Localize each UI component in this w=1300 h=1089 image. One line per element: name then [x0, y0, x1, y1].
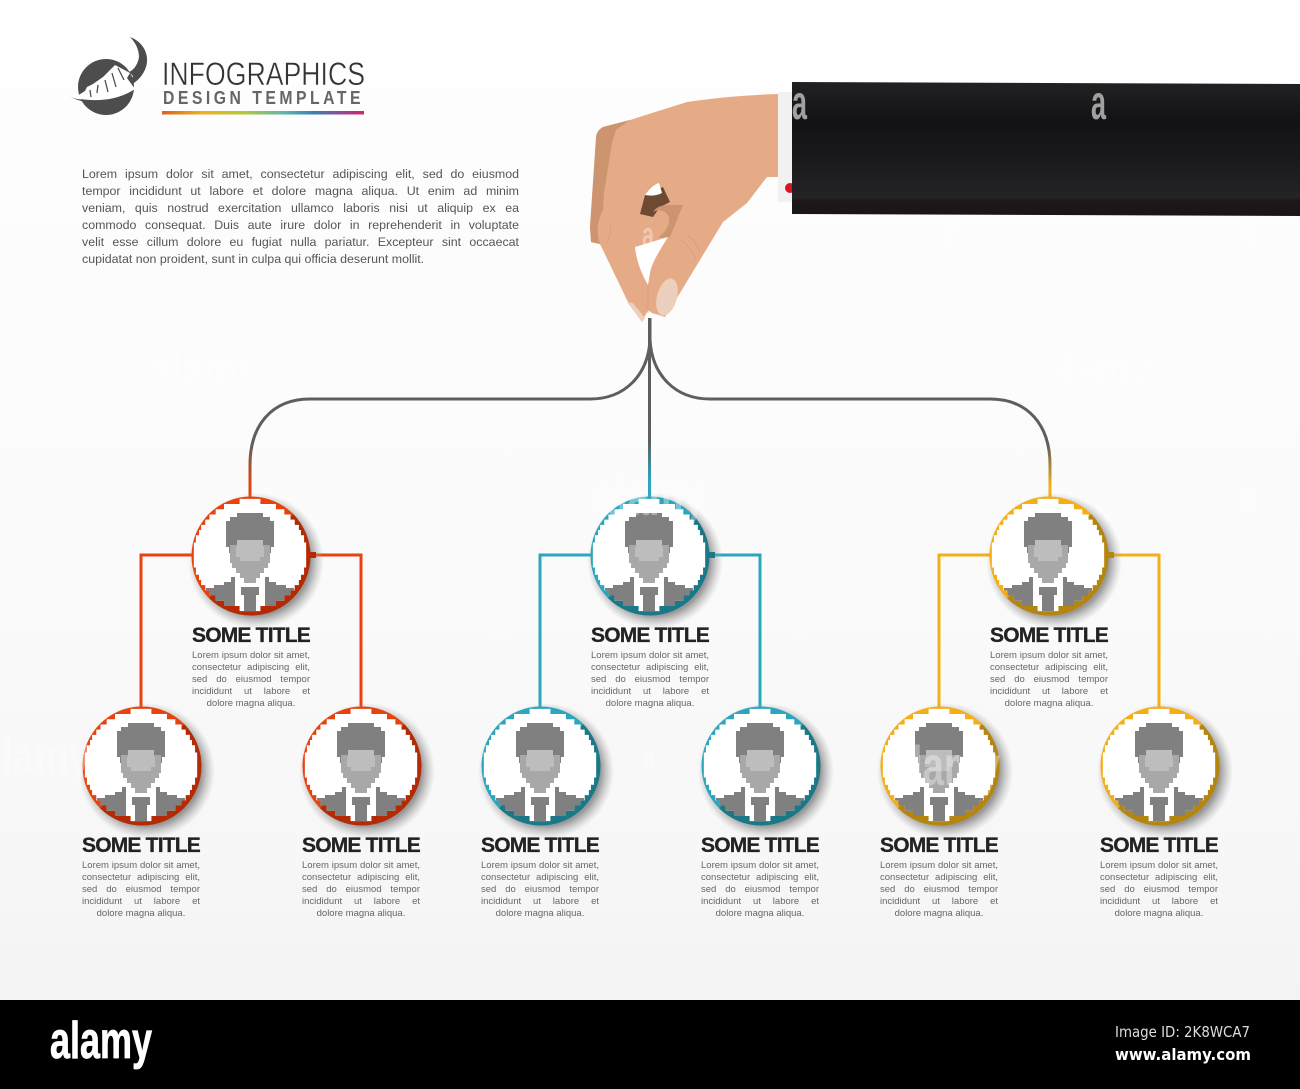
text: yellow manager: Lorem ipsum dolor sit amet, — [990, 650, 1108, 661]
node: red manager portrait — [188, 493, 324, 629]
blue branch connectors — [540, 555, 760, 708]
text: red report 2: sed do eiusmod tempor — [302, 884, 420, 895]
text: blue manager: SOME TITLE — [591, 624, 709, 647]
intro paragraph: tempor incididunt ut labore et dolore magna aliqua. Ut enim ad minim — [82, 184, 519, 198]
hand pinching the connectors — [590, 94, 778, 322]
watermarks: a — [643, 737, 656, 778]
node: yellow manager portrait — [986, 493, 1122, 629]
red branch connectors — [141, 555, 361, 708]
text: yellow report 1 — [880, 834, 998, 919]
text: red report 2: consectetur adipiscing elit, — [302, 872, 420, 883]
node: red report 2 portrait — [299, 703, 435, 839]
text: blue report 1: sed do eiusmod tempor — [481, 884, 599, 895]
text: blue manager: sed do eiusmod tempor — [591, 674, 709, 685]
intro paragraph — [82, 167, 519, 266]
watermarks: a — [943, 212, 956, 253]
text: red report 1: consectetur adipiscing elit, — [82, 872, 200, 883]
watermarks: a — [642, 214, 655, 255]
text: red report 2: Lorem ipsum dolor sit amet, — [302, 860, 420, 871]
intro paragraph: cupidatat non proident, sunt in culpa qui officia deserunt mollit. — [82, 252, 424, 266]
text: yellow manager: incididunt ut labore et — [990, 686, 1108, 697]
watermarks: a — [1243, 212, 1256, 253]
footer bar — [0, 1000, 1300, 1089]
text: yellow report 2: dolore magna aliqua. — [1115, 908, 1203, 919]
logo rainbow bar — [162, 111, 364, 114]
text: yellow manager: SOME TITLE — [990, 624, 1108, 647]
text: blue manager: Lorem ipsum dolor sit amet, — [591, 650, 709, 661]
text: blue report 2: sed do eiusmod tempor — [701, 884, 819, 895]
text: blue report 1: SOME TITLE — [481, 834, 599, 857]
text: blue manager: dolore magna aliqua. — [606, 698, 694, 709]
text: blue report 2: SOME TITLE — [701, 834, 819, 857]
text: yellow report 1: Lorem ipsum dolor sit amet, — [880, 860, 998, 871]
watermarks: alamy — [595, 464, 705, 527]
text: red manager: dolore magna aliqua. — [207, 698, 295, 709]
intro paragraph: velit esse cillum dolore eu fugiat nulla pariatur. Excepteur sint occaecat — [82, 235, 519, 249]
main connector: to left branch — [250, 318, 650, 498]
text: blue manager — [591, 624, 710, 709]
text: red report 2: incididunt ut labore et — [302, 896, 420, 907]
main connector: to right branch — [650, 318, 1050, 498]
text: yellow manager: sed do eiusmod tempor — [990, 674, 1108, 685]
text: yellow manager: dolore magna aliqua. — [1005, 698, 1093, 709]
text: blue report 1: Lorem ipsum dolor sit amet, — [481, 860, 599, 871]
text: yellow report 1: dolore magna aliqua. — [895, 908, 983, 919]
arm: suit sleeve and cuff: a — [792, 77, 807, 130]
watermarks: alamy — [1042, 337, 1152, 400]
text: blue report 1: dolore magna aliqua. — [496, 908, 584, 919]
text: red report 1: dolore magna aliqua. — [97, 908, 185, 919]
text: yellow manager: consectetur adipiscing elit, — [990, 662, 1108, 673]
text: blue manager: incididunt ut labore et — [591, 686, 709, 697]
logo icon — [70, 37, 147, 115]
text: yellow report 2: incididunt ut labore et — [1100, 896, 1218, 907]
arm: suit sleeve and cuff: a — [1091, 77, 1106, 130]
watermarks: a — [493, 605, 506, 646]
footer image id: Image ID: 2K8WCA7 — [1115, 1023, 1250, 1041]
node: blue report 1 portrait — [478, 703, 614, 839]
text: yellow report 1: sed do eiusmod tempor — [880, 884, 998, 895]
text: red report 2: dolore magna aliqua. — [317, 908, 405, 919]
text: blue manager: consectetur adipiscing elit, — [591, 662, 709, 673]
text: red manager — [192, 624, 310, 709]
text: blue report 1: consectetur adipiscing elit, — [481, 872, 599, 883]
text: yellow manager — [990, 624, 1108, 709]
text: blue report 2 — [701, 834, 820, 919]
text: yellow report 1: incididunt ut labore et — [880, 896, 998, 907]
text: red report 2: SOME TITLE — [302, 834, 420, 857]
watermarks: alamy — [890, 734, 1000, 797]
intro paragraph: commodo consequat. Duis aute irure dolor in reprehenderit in voluptate — [82, 218, 519, 232]
watermarks: alamy — [150, 337, 260, 400]
node: yellow report 1 portrait — [877, 703, 1013, 839]
watermarks: a — [1243, 475, 1256, 516]
text: red manager: incididunt ut labore et — [192, 686, 310, 697]
logo wordmark — [162, 56, 365, 108]
text: yellow report 1: SOME TITLE — [880, 834, 998, 857]
node: blue report 2 portrait — [698, 703, 834, 839]
text: yellow report 2: sed do eiusmod tempor — [1100, 884, 1218, 895]
text: yellow report 2 — [1100, 834, 1218, 919]
node: blue manager portrait — [587, 493, 723, 629]
text: red report 1: sed do eiusmod tempor — [82, 884, 200, 895]
main connector: to centre branch — [648, 318, 651, 498]
text: red manager: SOME TITLE — [192, 624, 310, 647]
arm: suit sleeve and cuff — [778, 77, 1300, 216]
logo wordmark: INFOGRAPHICS — [162, 56, 365, 92]
logo wordmark: DESIGN TEMPLATE — [163, 88, 364, 108]
text: blue report 2: incididunt ut labore et — [701, 896, 819, 907]
intro paragraph: veniam, quis nostrud exercitation ullamco laboris nisi ut aliquip ex ea — [82, 201, 519, 215]
text: blue report 1 — [481, 834, 600, 919]
text: red report 1: incididunt ut labore et — [82, 896, 200, 907]
text: red report 1: SOME TITLE — [82, 834, 200, 857]
intro paragraph: Lorem ipsum dolor sit amet, consectetur adipiscing elit, sed do eiusmod — [82, 167, 519, 181]
text: yellow report 1: consectetur adipiscing elit, — [880, 872, 998, 883]
text: blue report 2: consectetur adipiscing elit, — [701, 872, 819, 883]
text: red manager: sed do eiusmod tempor — [192, 674, 310, 685]
text: yellow report 2: Lorem ipsum dolor sit amet, — [1100, 860, 1218, 871]
text: blue report 2: Lorem ipsum dolor sit amet, — [701, 860, 819, 871]
text: blue report 2: dolore magna aliqua. — [716, 908, 804, 919]
text: blue report 1: incididunt ut labore et — [481, 896, 599, 907]
text: red manager: Lorem ipsum dolor sit amet, — [192, 650, 310, 661]
text: red report 2 — [302, 834, 420, 919]
text: red report 1 — [82, 834, 200, 919]
footer alamy logo: alamy — [50, 1012, 152, 1070]
node: red report 1 portrait — [79, 703, 215, 839]
text: yellow report 2: consectetur adipiscing elit, — [1100, 872, 1218, 883]
watermarks — [0, 212, 1256, 797]
text: red report 1: Lorem ipsum dolor sit amet, — [82, 860, 200, 871]
text: red manager: consectetur adipiscing elit, — [192, 662, 310, 673]
footer url: www.alamy.com — [1115, 1045, 1251, 1064]
node: yellow report 2 portrait — [1097, 703, 1233, 839]
text: yellow report 2: SOME TITLE — [1100, 834, 1218, 857]
yellow branch connectors — [939, 555, 1159, 708]
watermarks: a — [793, 605, 806, 646]
